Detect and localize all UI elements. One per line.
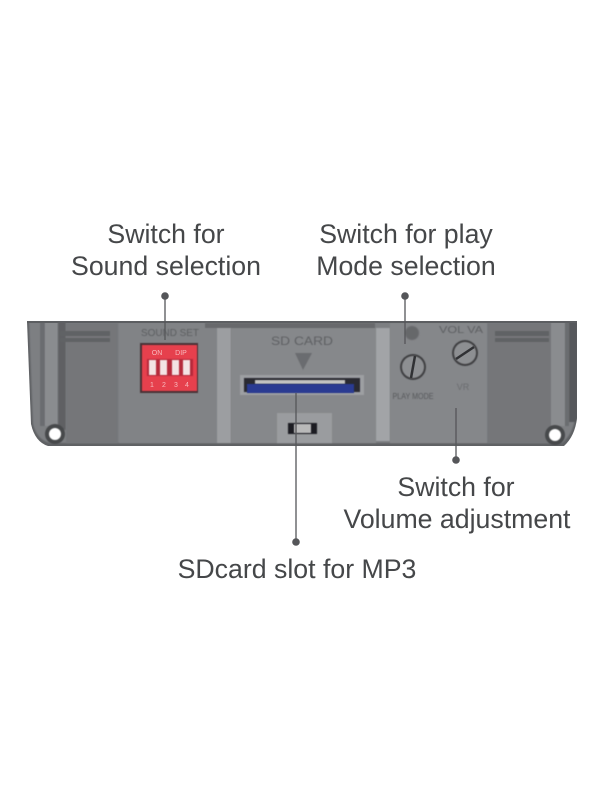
callout: volume adjustment: Switch for [397,472,515,502]
icon: red DIP switch: 2 [162,382,166,389]
infographic: device back panel with callouts [27,224,577,578]
icon: play mode screw [400,354,426,380]
icon: red DIP switch: 1 [150,382,154,389]
callout: SD card slot [178,393,416,584]
icon: right screw hole [545,425,565,445]
icon: red DIP switch: ON [152,350,162,357]
callout: sound selection [71,219,261,340]
icon: down triangle [295,353,312,370]
panel: sound set [119,323,217,443]
SD card label: SD CARD [271,336,333,348]
icon: red DIP switch: 4 [185,382,189,389]
panel: SD card [231,328,376,443]
slide switch [277,413,332,443]
divider strip left [217,326,231,443]
device body [27,321,577,446]
icon: red DIP switch: 3 [174,382,178,389]
top edge [27,321,577,323]
callout: play mode selection: Switch for play [319,219,493,249]
icon: volume screw [452,340,478,366]
icon: red DIP switch [140,343,198,393]
callout: sound selection: Sound selection [71,251,261,281]
callout: SD card slot: SDcard slot for MP3 [178,554,416,584]
VR label: VR [457,382,470,392]
volume labels: VOL VA [439,325,483,336]
sound set label: SOUND SET [141,328,199,339]
divider strip right [376,328,390,441]
callout: volume adjustment [344,408,571,534]
callout: sound selection: Switch for [107,219,225,249]
right end section [487,322,577,443]
callout: volume adjustment: Volume adjustment [344,504,571,534]
icon: red DIP switch: DIP [175,350,187,357]
callout: play mode selection [316,219,496,344]
SD card slot [240,375,364,395]
left end section [40,322,118,443]
indicator light hole [405,326,419,340]
panel: switches [390,323,487,443]
play mode label: PLAY MODE [392,391,434,401]
callout: play mode selection: Mode selection [316,251,496,281]
icon: left screw hole [45,424,65,444]
